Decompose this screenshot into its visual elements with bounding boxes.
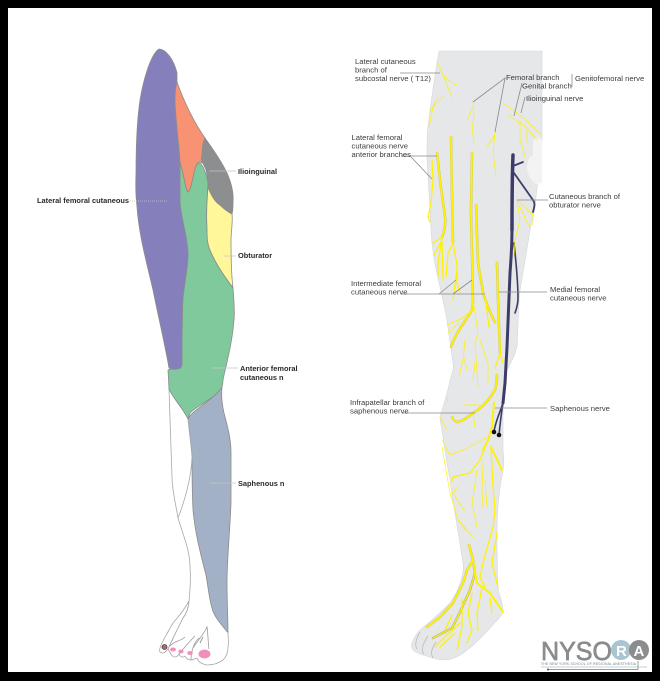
label: medial femoral cutaneous nerve: Medial femoral [550, 285, 600, 294]
left leg: dermatome map [136, 49, 234, 665]
thin thigh and knee branches [429, 61, 542, 430]
label: infrapatellar branch of saphenous nerve: saphenous nerve [350, 406, 409, 416]
toe outlines [416, 632, 436, 658]
obturator and medial femoral cutaneous nerve [492, 155, 534, 437]
thick thigh nerves [428, 137, 503, 450]
region: unshaded lateral lower leg [169, 389, 192, 518]
leg silhouette [411, 51, 542, 660]
right leg labels [350, 57, 644, 416]
label: anterior femoral cutaneous: cutaneous n [240, 373, 284, 382]
region: obturator [207, 187, 233, 288]
label: saphenous: Saphenous n [238, 479, 285, 488]
NYSORA logo: A [634, 643, 644, 660]
region: lateral femoral cutaneous [136, 49, 188, 369]
label: ilioinguinal [209, 167, 277, 176]
label: femoral branch [473, 73, 560, 132]
label: lateral femoral cutaneous nerve anterior branches [352, 133, 437, 179]
label: ilioinguinal: Ilioinguinal [238, 167, 277, 176]
region: ilioinguinal [202, 138, 233, 214]
label: intermediate femoral cutaneous nerve: Intermediate femoral [351, 279, 421, 288]
label: femoral branch: Femoral branch [506, 73, 560, 82]
foot outline [160, 518, 228, 665]
label: lateral femoral cutaneous nerve anterior branches: Lateral femoral [352, 133, 403, 142]
region: saphenous [188, 387, 231, 633]
label: intermediate femoral cutaneous nerve [351, 279, 485, 296]
label: medial femoral cutaneous nerve [499, 285, 606, 302]
label: lateral cutaneous branch of subcostal nerve [355, 57, 440, 83]
left leg labels [37, 167, 298, 488]
label: anterior femoral cutaneous [212, 364, 298, 382]
label: genital branch: Genital branch [522, 82, 572, 90]
label: lateral femoral cutaneous: Lateral femoral cutaneous [37, 196, 129, 205]
foot branches [427, 545, 503, 650]
NYSORA logo: THE NEW YORK SCHOOL OF REGIONAL ANESTHESIA [541, 662, 637, 666]
region: anterior femoral cutaneous [168, 163, 234, 419]
label: lateral femoral cutaneous nerve anterior branches: anterior branches [352, 150, 411, 159]
label: saphenous [210, 479, 285, 488]
right leg: cutaneous nerves [411, 51, 542, 660]
label: obturator: Obturator [238, 251, 272, 260]
label: genitofemoral nerve [572, 74, 644, 87]
label: cutaneous branch of obturator nerve [517, 192, 621, 210]
label: infrapatellar branch of saphenous nerve [350, 398, 475, 416]
label: cutaneous branch of obturator nerve: Cutaneous branch of [549, 192, 621, 201]
label: infrapatellar branch of saphenous nerve: Infrapatellar branch of [350, 398, 425, 407]
label: anterior femoral cutaneous: Anterior femoral [240, 364, 298, 373]
NYSORA logo: R [616, 643, 627, 660]
NYSORA logo [541, 636, 649, 670]
label: cutaneous branch of obturator nerve: obturator nerve [549, 200, 601, 210]
label: intermediate femoral cutaneous nerve: cutaneous nerve [351, 288, 408, 296]
pubic bulge [527, 138, 542, 184]
label: ilioinguinal nerve: Ilioinguinal nerve [526, 94, 583, 103]
toenails [162, 644, 210, 658]
label: lateral cutaneous branch of subcostal nerve: branch of [355, 66, 388, 74]
label: ilioinguinal nerve [521, 94, 583, 113]
label: genitofemoral nerve: Genitofemoral nerve [575, 74, 644, 83]
label: lateral femoral cutaneous nerve anterior branches: cutaneous nerve [352, 142, 408, 150]
label: genital branch [514, 82, 572, 116]
label: lateral cutaneous branch of subcostal nerve: subcostal nerve ( T12) [355, 74, 431, 83]
lower leg branches [442, 435, 502, 587]
label: medial femoral cutaneous nerve: cutaneous nerve [550, 294, 606, 302]
label: saphenous nerve [495, 404, 610, 413]
label: lateral cutaneous branch of subcostal nerve: Lateral cutaneous [355, 57, 416, 66]
region: genitofemoral [175, 82, 205, 192]
label: saphenous nerve: Saphenous nerve [550, 404, 610, 413]
NYSORA logo: NYSO [541, 636, 612, 666]
